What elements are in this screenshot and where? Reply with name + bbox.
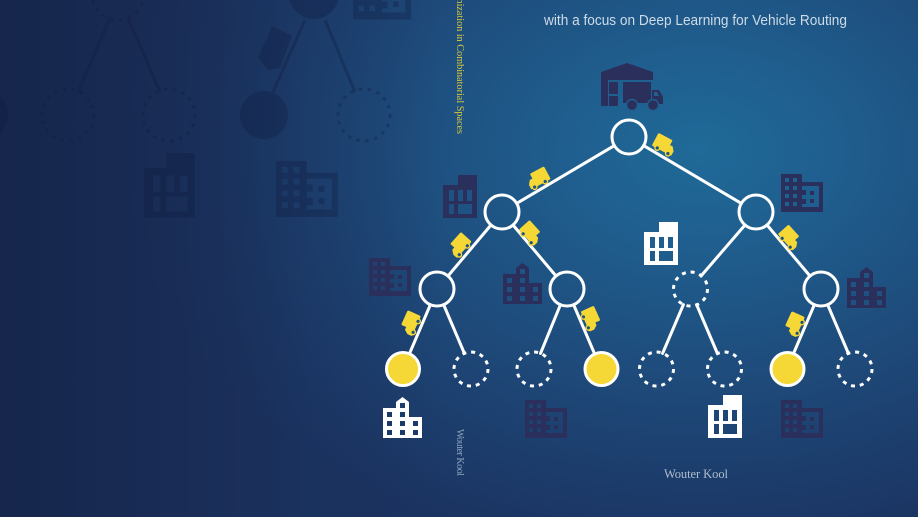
tree edges xyxy=(410,146,848,353)
white buildings xyxy=(383,222,742,438)
dark buildings xyxy=(369,174,886,438)
author: Wouter Kool xyxy=(664,467,729,481)
tree nodes xyxy=(386,120,872,386)
subtitle: with a focus on Deep Learning for Vehicle Routing xyxy=(543,13,847,29)
spine author: Wouter Kool xyxy=(454,429,465,476)
back cover ghost tree xyxy=(0,0,411,218)
yellow delivery trucks xyxy=(399,133,807,338)
icon: warehouse with truck xyxy=(601,63,663,110)
